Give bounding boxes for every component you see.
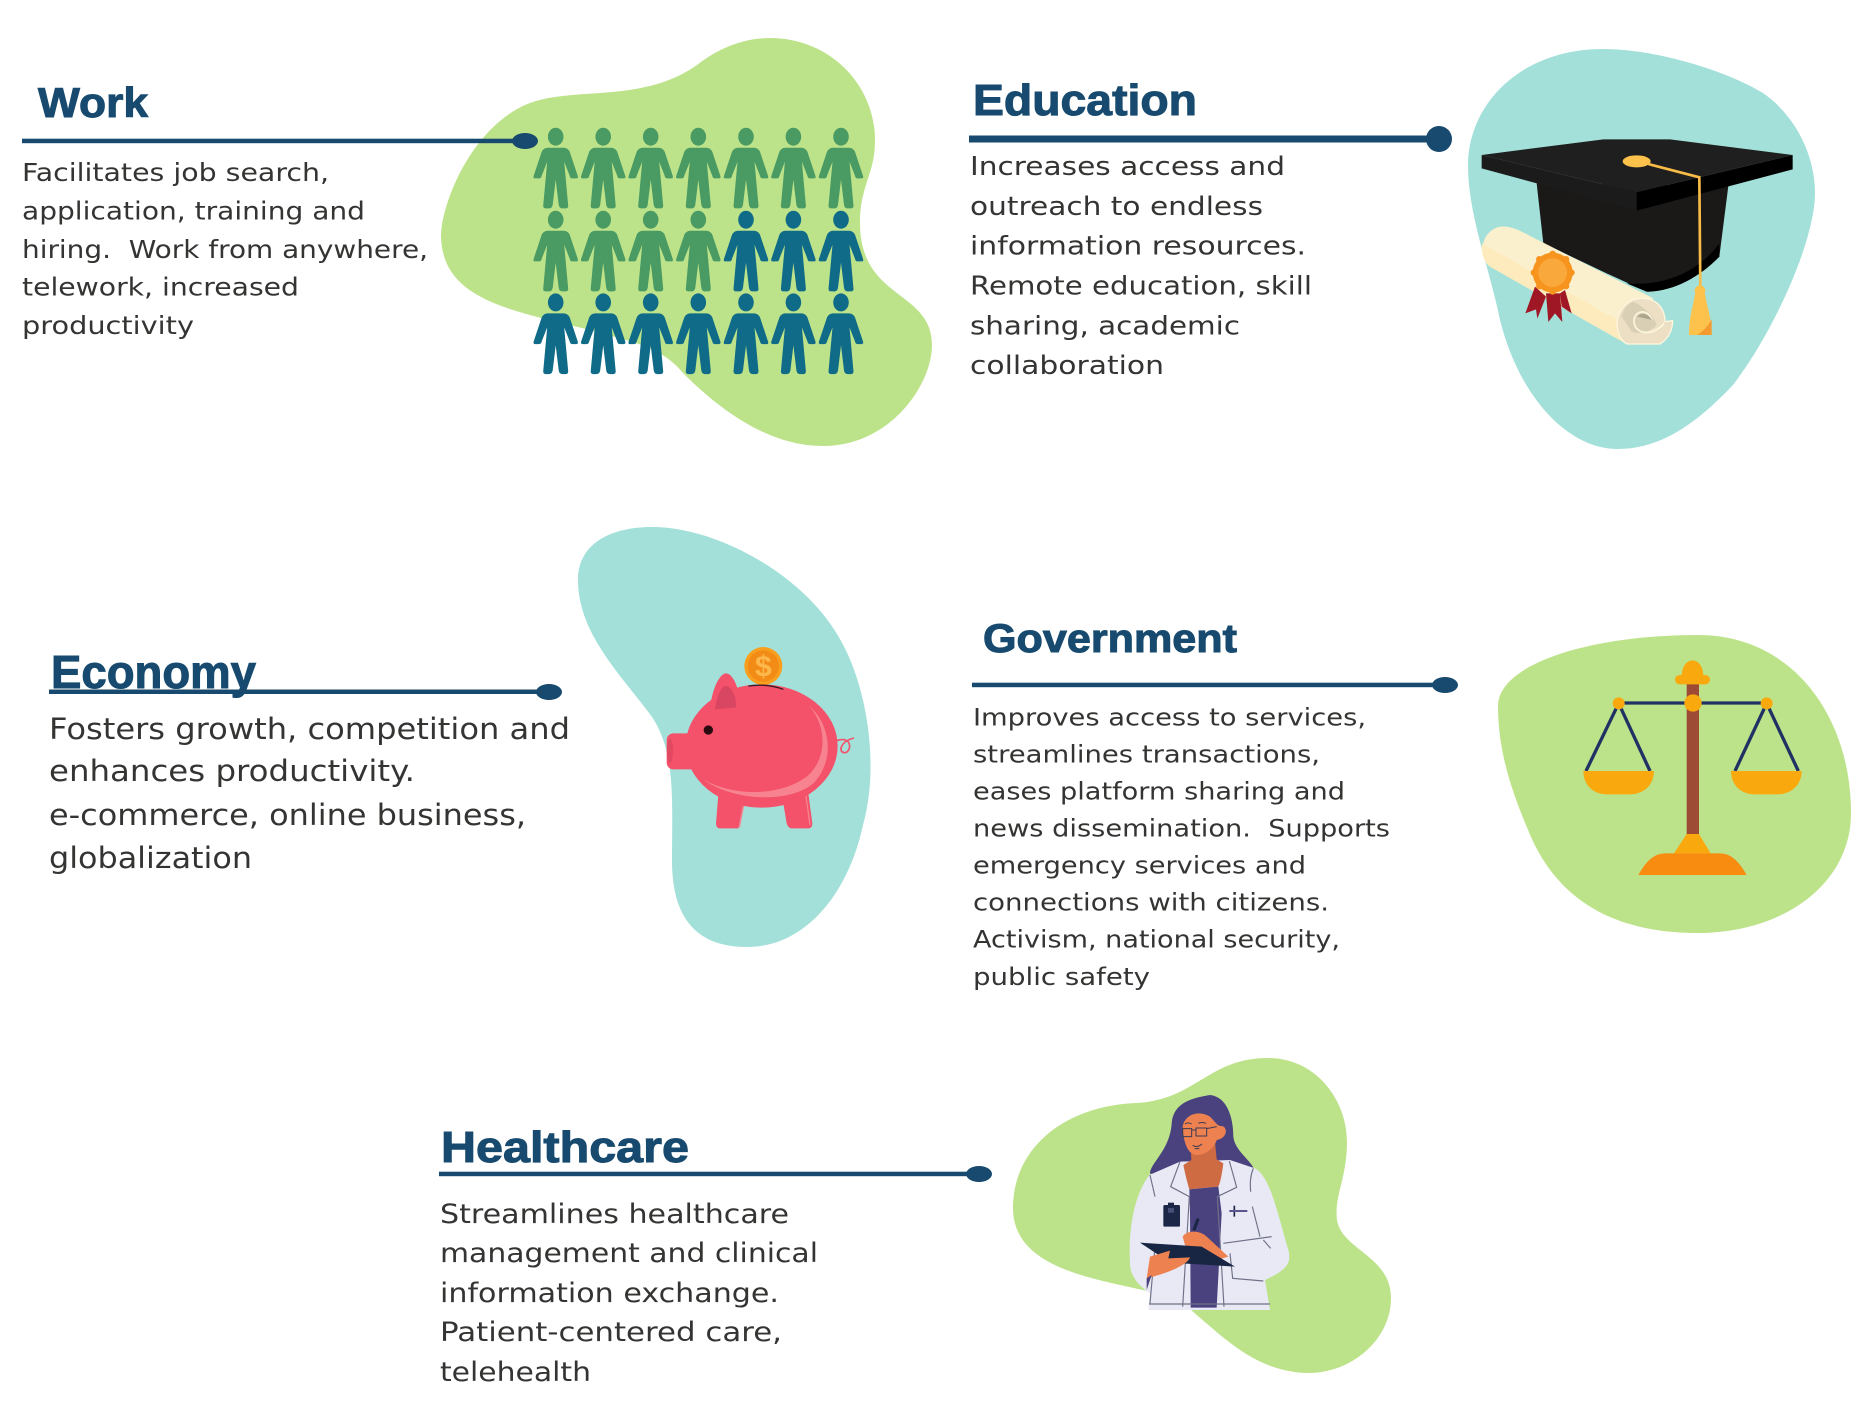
icon: balance scale xyxy=(1583,660,1802,875)
heading: Healthcare: Healthcare xyxy=(441,1123,689,1172)
icon: piggy bank xyxy=(667,647,854,828)
text block: Government description: Improves access to services, xyxy=(973,704,1366,732)
text block: Government description: emergency services and xyxy=(973,852,1306,880)
connector line: Education xyxy=(969,126,1452,152)
blob: healthcare background xyxy=(1013,1058,1391,1373)
text block: Education description: information resources. xyxy=(970,232,1306,262)
panel: Work xyxy=(22,38,932,446)
text block: Work description: telework, increased xyxy=(22,273,299,302)
connector line: Healthcare xyxy=(439,1166,992,1182)
text block: Healthcare description: information exchange. xyxy=(440,1278,779,1309)
text block: Education description xyxy=(970,152,1312,381)
blob: education background xyxy=(1468,49,1815,449)
panel: Economy xyxy=(49,527,871,947)
icon: doctor with clipboard xyxy=(1130,1095,1289,1310)
panel: Healthcare xyxy=(439,1058,1391,1388)
text block: Work description xyxy=(22,158,428,340)
text block: Education description: sharing, academic xyxy=(970,312,1240,342)
text block: Healthcare description: management and clinical xyxy=(440,1238,818,1269)
connector line: Economy xyxy=(49,684,562,700)
text block: Government description: Activism, national security, xyxy=(973,926,1340,954)
text block: Healthcare description xyxy=(440,1199,818,1388)
text block: Economy description: Fosters growth, competition and xyxy=(49,712,570,746)
blob: work background xyxy=(441,38,932,446)
coin xyxy=(744,647,782,685)
text block: Education description: collaboration xyxy=(970,351,1164,381)
heading: Education: Education xyxy=(973,76,1197,125)
text block: Government description: eases platform sharing and xyxy=(973,778,1345,806)
text block: Education description: Remote education, skill xyxy=(970,272,1312,302)
text block: Economy description: e-commerce, online business, xyxy=(49,798,526,832)
text block: Work description: Facilitates job search, xyxy=(22,158,329,187)
heading: Work: Work xyxy=(38,79,149,126)
panel: Government xyxy=(972,617,1851,991)
text block: Government description xyxy=(973,704,1390,991)
text block: Economy description xyxy=(49,712,570,875)
heading: Economy: Economy xyxy=(51,646,256,698)
text block: Government description: news dissemination. Supports xyxy=(973,814,1390,842)
text block: Economy description: enhances productivity. xyxy=(49,754,415,788)
blob: economy background xyxy=(578,527,871,947)
text block: Government description: connections with citizens. xyxy=(973,888,1329,916)
text block: Education description: outreach to endless xyxy=(970,192,1263,222)
text block: Government description: streamlines transactions, xyxy=(973,740,1320,768)
heading: Government: Government xyxy=(983,617,1237,661)
text block: Work description: application, training and xyxy=(22,197,365,226)
icon: people grid xyxy=(533,128,863,374)
text block: Work description: productivity xyxy=(22,311,194,340)
icon: graduation cap and diploma xyxy=(1482,139,1793,344)
coin: $ xyxy=(755,651,772,684)
panel: Education xyxy=(969,49,1815,449)
text block: Government description: public safety xyxy=(973,963,1150,991)
text block: Healthcare description: Streamlines healthcare xyxy=(440,1199,789,1230)
text block: Education description: Increases access and xyxy=(970,152,1285,182)
connector line: Work xyxy=(22,133,538,149)
text block: Healthcare description: telehealth xyxy=(440,1357,591,1388)
text block: Work description: hiring. Work from anywhere, xyxy=(22,235,428,264)
connector line: Government xyxy=(972,677,1458,693)
text block: Economy description: globalization xyxy=(49,841,252,875)
text block: Healthcare description: Patient-centered care, xyxy=(440,1317,782,1348)
blob: government background xyxy=(1498,635,1851,933)
